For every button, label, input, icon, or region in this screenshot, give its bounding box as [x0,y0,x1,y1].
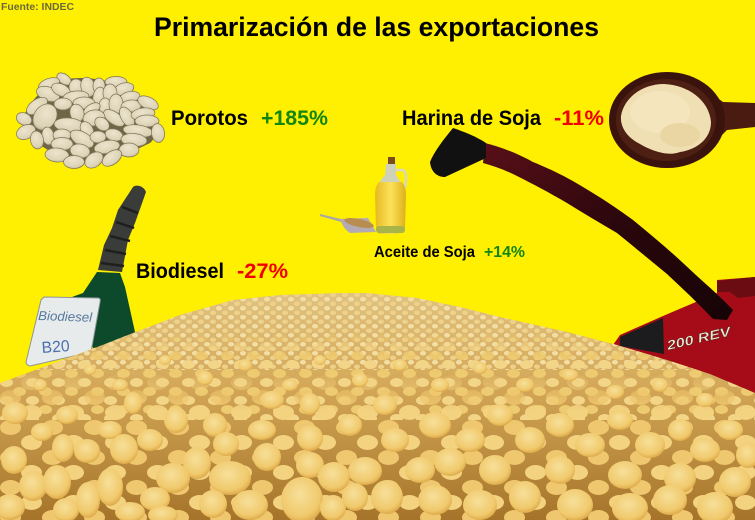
bottle handle [396,170,406,188]
title: Primarización de las exportaciones [154,12,599,42]
fuel tag [26,297,100,366]
tag grade text: B20 [41,338,70,357]
bottle cork [388,157,395,164]
nozzle hose [98,186,146,272]
value: Biodiesel change: -27% [237,260,288,283]
harvester red body [613,277,755,395]
harvester dark cab window [620,318,664,354]
scoop [340,218,376,233]
tag brand text: Biodiesel [38,308,94,325]
bottle oil body [375,182,406,234]
icon: wooden spoon with soy flour [609,72,755,168]
label: Porotos: Porotos [171,107,248,130]
scoop handle [320,214,345,223]
nozzle green body [72,272,135,348]
value: Aceite de Soja change: +14% [484,244,525,261]
label: Aceite de Soja: Aceite de Soja [374,244,475,261]
label: Harina de Soja: Harina de Soja [402,107,541,130]
spout black head [430,128,486,177]
harvester top dark panel [717,277,755,298]
icon: combine harvester unloading spout [430,128,755,395]
icon: white beans pile [14,70,166,171]
soybean pile [0,290,755,520]
label: Biodiesel: Biodiesel [136,260,224,283]
value: Harina de Soja change: -11% [554,107,604,130]
icon: soybean oil bottle with scoop [320,157,406,234]
spout tube [483,143,733,320]
value: Porotos change: +185% [261,107,328,130]
bottle neck [378,164,402,184]
source note: Fuente: INDEC [1,2,74,13]
icon: biodiesel fuel nozzle [26,186,146,366]
harvester model badge: 200 REV [664,323,734,353]
